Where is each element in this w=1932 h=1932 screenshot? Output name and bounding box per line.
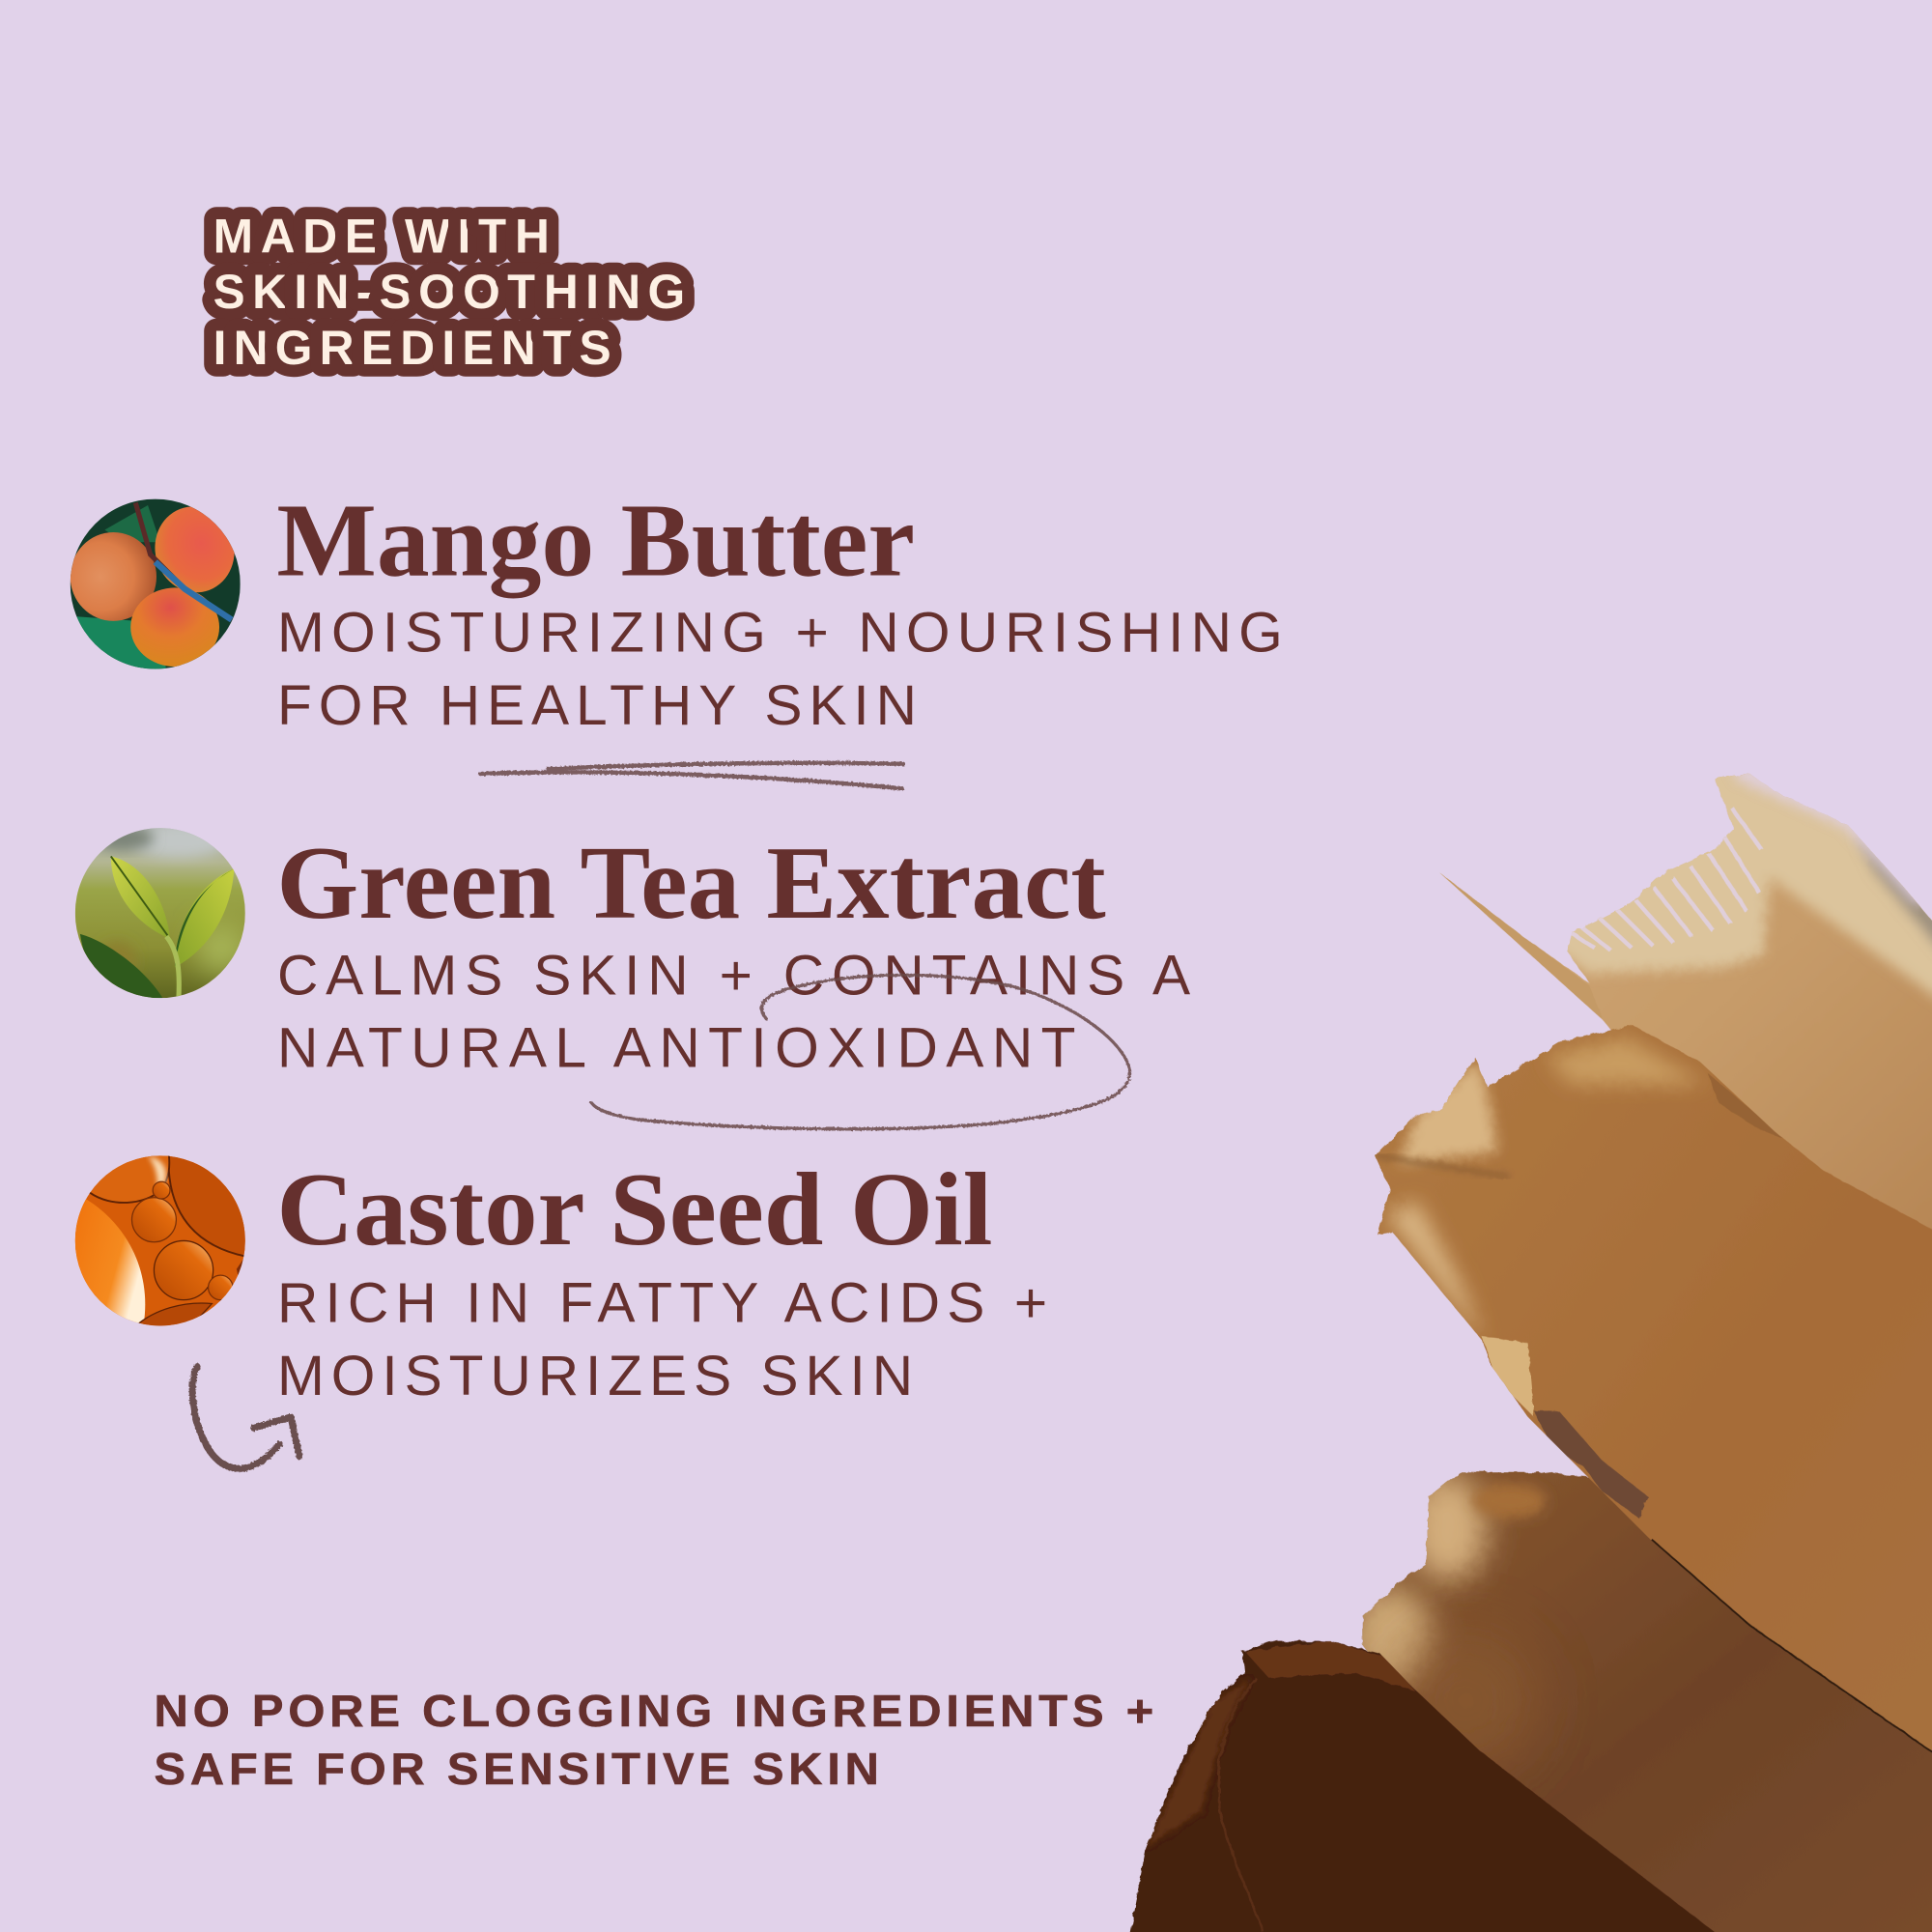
ingredient: mango butter — [71, 483, 1283, 737]
ingredient: green tea extract — [75, 823, 1191, 1080]
title: castor seed oil: Castor Seed Oil — [276, 1151, 992, 1267]
description: castor seed oil: RICH IN FATTY ACIDS + — [277, 1272, 1047, 1335]
scribble: circled text — [591, 975, 1130, 1129]
heading: made with skin-soothing ingredients: SKIN-SOOTHING — [213, 265, 685, 319]
swatch: medium shade — [1368, 1010, 1932, 1786]
description: castor seed oil — [277, 1272, 1047, 1407]
description: green tea extract — [277, 944, 1191, 1080]
description: mango butter — [277, 602, 1283, 737]
footer note: NO PORE CLOGGING INGREDIENTS + — [154, 1686, 1158, 1736]
heading: made with skin-soothing ingredients: MADE WITH — [213, 209, 550, 263]
description: mango butter: FOR HEALTHY SKIN — [277, 674, 917, 737]
footer note: SAFE FOR SENSITIVE SKIN — [154, 1744, 884, 1794]
title: green tea extract: Green Tea Extract — [276, 825, 1106, 941]
ingredient: castor seed oil — [62, 1151, 1047, 1407]
description: green tea extract: CALMS SKIN + CONTAINS A — [277, 944, 1191, 1007]
heading: made with skin-soothing ingredients: INGREDIENTS — [213, 321, 611, 375]
scribble: underline — [480, 763, 903, 788]
footer note — [154, 1686, 1158, 1794]
swatch: lightest shade — [1439, 773, 1932, 1230]
foundation swatches — [1109, 764, 1932, 1932]
icon: oil droplets photo — [75, 1155, 245, 1325]
description: green tea extract: NATURAL ANTIOXIDANT — [277, 1017, 1076, 1080]
arrow: hand-drawn — [192, 1367, 299, 1468]
swatch: darkest shade — [1130, 1639, 1715, 1932]
swatch: deep shade — [1350, 1466, 1932, 1932]
icon: green tea photo — [75, 823, 246, 998]
description: mango butter: MOISTURIZING + NOURISHING — [277, 602, 1283, 665]
heading: made with skin-soothing ingredients — [213, 209, 685, 375]
title: mango butter: Mango Butter — [276, 483, 915, 599]
icon: mango photo — [71, 497, 244, 669]
description: castor seed oil: MOISTURIZES SKIN — [277, 1345, 913, 1407]
